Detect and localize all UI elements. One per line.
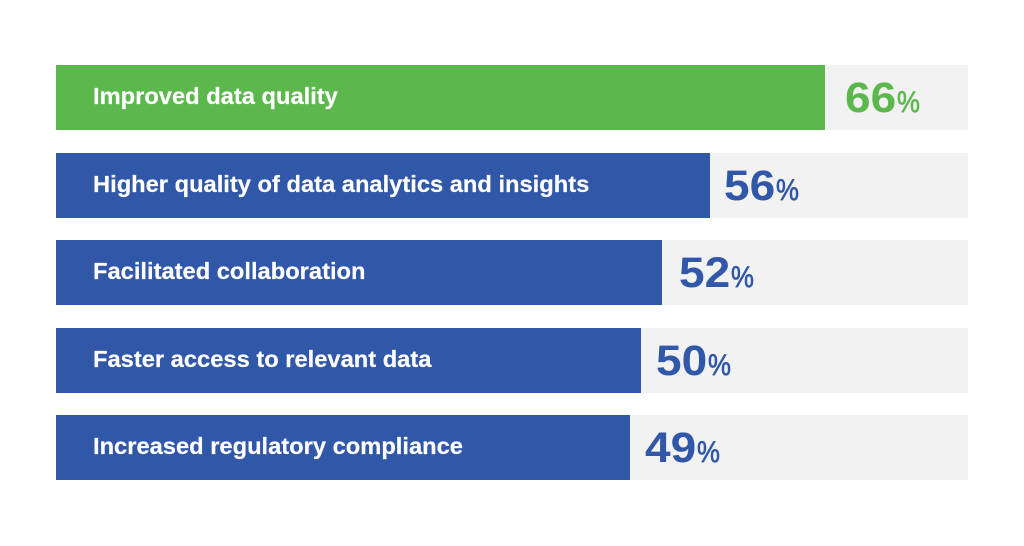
bar: 49% xyxy=(56,415,630,480)
value: 49%: % xyxy=(697,436,720,469)
label: improved data quality: Improved data quality xyxy=(93,83,338,109)
bar: 52% xyxy=(56,240,662,305)
value: 50% xyxy=(656,337,731,385)
row: faster access 50% xyxy=(56,328,968,393)
bar: 50% xyxy=(56,328,641,393)
row: higher quality of data analytics 56% xyxy=(56,153,968,218)
value: 49%: 49 xyxy=(645,424,696,472)
row: improved data quality 66% xyxy=(56,65,968,130)
value: 50%: 50 xyxy=(656,337,707,385)
value: 66%: 66 xyxy=(845,74,896,122)
value: 66%: % xyxy=(897,86,920,119)
value: 52%: 52 xyxy=(679,249,730,297)
row: increased regulatory compliance 49% xyxy=(56,415,968,480)
value: 49% xyxy=(645,424,720,472)
label: increased regulatory compliance: Increased regulatory compliance xyxy=(93,433,463,459)
value: 66% xyxy=(845,74,920,122)
chart: survey results xyxy=(56,65,968,480)
bar: 56% xyxy=(56,153,710,218)
value: 56%: 56 xyxy=(724,162,775,210)
value: 56% xyxy=(724,162,799,210)
value: 50%: % xyxy=(708,349,731,382)
bar: 66% xyxy=(56,65,825,130)
label: faster access to relevant data: Faster access to relevant data xyxy=(93,346,431,372)
value: 52%: % xyxy=(731,261,754,294)
label: higher quality of data analytics and insights: Higher quality of data analytics and insights xyxy=(93,171,589,197)
value: 52% xyxy=(679,249,754,297)
value: 56%: % xyxy=(776,174,799,207)
row: facilitated collaboration 52% xyxy=(56,240,968,305)
label: facilitated collaboration: Facilitated collaboration xyxy=(93,258,365,284)
